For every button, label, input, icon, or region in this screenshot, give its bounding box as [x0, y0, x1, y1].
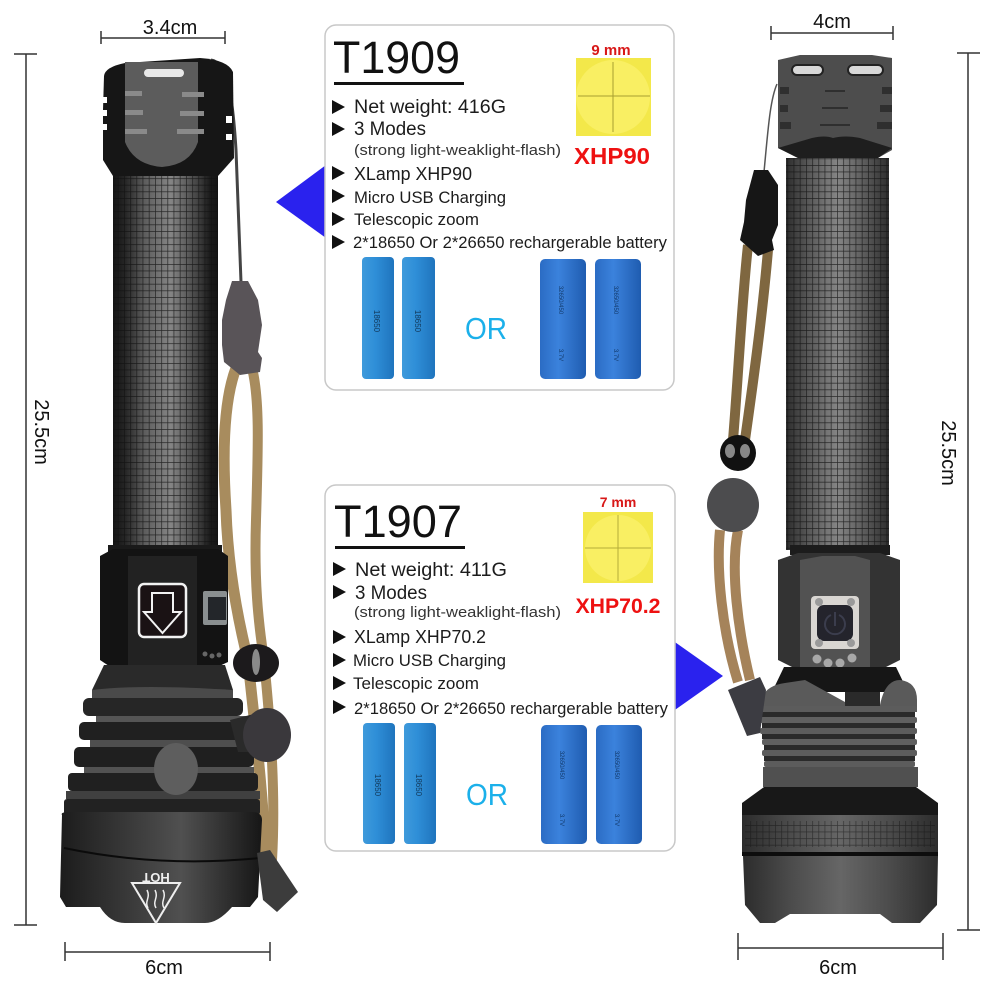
dimension: right height 25.5cm — [937, 53, 980, 930]
left flashlight T1909 — [60, 58, 298, 923]
26650 batteries: 32650/450 — [558, 751, 564, 780]
right collar ring — [790, 545, 890, 555]
left flare and fins — [64, 665, 260, 815]
blue pointer to T1909 — [276, 165, 326, 238]
right indicator LEDs — [812, 654, 856, 668]
heading T1909: T1909 — [333, 32, 460, 83]
18650 batteries — [362, 257, 435, 379]
right bezel — [743, 856, 938, 923]
26650 batteries: 32650/450 — [612, 286, 618, 315]
left hex collar — [100, 549, 228, 668]
dimension: bottom left width 6cm — [65, 942, 270, 979]
left head ridges — [125, 91, 204, 134]
18650 batteries: 18650 — [372, 310, 381, 333]
dimension: right height 25.5cm: 25.5cm — [937, 420, 959, 486]
left bezel groove — [64, 848, 260, 861]
icon: arrow button — [139, 584, 186, 637]
dimension: top left width 3.4cm — [101, 17, 225, 44]
dimension: bottom right width 6cm — [738, 933, 943, 979]
spec list: XLamp XHP90 — [354, 164, 472, 184]
left head slot — [144, 69, 184, 77]
left cord end — [257, 850, 298, 912]
right hex collar — [778, 553, 900, 667]
dimension: top right width 4cm: 4cm — [813, 11, 851, 33]
highlight blob — [154, 743, 198, 795]
chip size label: 9 mm — [591, 42, 631, 59]
right lobes — [760, 680, 917, 712]
26650 batteries: 3.7V — [612, 349, 618, 361]
26650 batteries: 3.7V — [558, 814, 564, 826]
left collar facet — [128, 556, 197, 668]
panel background — [325, 25, 674, 390]
spec list: (strong light-weaklight-flash) — [354, 143, 561, 159]
left head notches — [101, 97, 232, 140]
left bead — [233, 644, 279, 682]
spec list: 2*18650 Or 2*26650 rechargerable battery — [354, 699, 668, 718]
right fins — [760, 706, 918, 787]
right head ridges — [780, 87, 892, 129]
right collar facet — [800, 556, 870, 667]
bullet triangles — [333, 562, 346, 714]
OR label: OR — [465, 311, 507, 346]
26650 batteries — [540, 259, 641, 379]
right head — [778, 55, 892, 158]
spec list: Net weight: 411G — [355, 560, 507, 581]
panel: T1907 specs — [325, 485, 675, 851]
left head facet — [125, 62, 198, 167]
spec list: Micro USB Charging — [354, 188, 506, 207]
chip name: XHP90 — [574, 143, 650, 169]
spec list: Telescopic zoom — [353, 674, 479, 693]
18650 batteries: 18650 — [373, 774, 382, 797]
right thin lanyard — [764, 84, 777, 172]
left buckle — [222, 281, 262, 375]
right neck — [772, 667, 908, 692]
heading underline — [334, 82, 464, 85]
right flashlight T1907 — [707, 55, 938, 923]
left cord stopper — [230, 708, 291, 762]
chip name: XHP70.2 — [576, 595, 660, 618]
right bezel shoulder — [742, 787, 938, 815]
panel background — [325, 485, 675, 851]
spec list: Net weight: 416G — [354, 97, 506, 118]
right power switch — [811, 596, 859, 649]
right knurled body — [786, 158, 889, 550]
26650 batteries: 32650/450 — [557, 286, 563, 315]
blue pointer from T1907 — [672, 640, 723, 712]
right head chamfer — [778, 136, 892, 158]
heading T1907: T1907 — [334, 496, 462, 547]
spec list: XLamp XHP70.2 — [354, 627, 486, 647]
right head slots — [792, 65, 883, 75]
left collar ring — [108, 545, 222, 557]
chip size label: 7 mm — [600, 494, 636, 510]
OR label: OR — [466, 777, 508, 812]
left head — [103, 58, 234, 176]
dimension: top left width 3.4cm: 3.4cm — [143, 17, 197, 39]
dimension: bottom left width 6cm: 6cm — [145, 957, 183, 979]
right cord stopper — [707, 478, 759, 532]
right cords — [719, 245, 768, 682]
bullet triangles — [332, 100, 345, 249]
26650 batteries — [541, 725, 642, 844]
26650 batteries: 32650/450 — [613, 751, 619, 780]
HOT logo: HOT — [142, 870, 170, 885]
spec list: 2*18650 Or 2*26650 rechargerable battery — [353, 233, 667, 252]
spec list: Telescopic zoom — [354, 210, 479, 229]
dimension: bottom right width 6cm: 6cm — [819, 957, 857, 979]
18650 batteries — [363, 723, 436, 844]
spec list: (strong light-weaklight-flash) — [354, 605, 561, 621]
left lanyard — [211, 60, 273, 860]
dimension: top right width 4cm — [771, 11, 893, 40]
left power switch — [202, 591, 227, 658]
LED chip XHP70.2 — [583, 512, 653, 583]
18650 batteries: 18650 — [414, 774, 423, 797]
left knurled body — [113, 176, 218, 550]
26650 batteries: 3.7V — [613, 814, 619, 826]
left bezel — [60, 812, 262, 923]
18650 batteries: 18650 — [413, 310, 422, 333]
right knurled ring — [742, 815, 938, 856]
LED chip XHP90 — [576, 58, 651, 136]
right buckle — [740, 170, 778, 256]
spec list: 3 Modes — [354, 119, 426, 140]
panel: T1909 specs — [325, 25, 674, 390]
spec list: Micro USB Charging — [353, 651, 506, 670]
right cord end — [728, 677, 766, 736]
heading underline — [335, 546, 465, 549]
HOT logo — [132, 870, 180, 923]
dimension: left height 25.5cm — [14, 54, 52, 925]
dimension: left height 25.5cm: 25.5cm — [30, 399, 52, 465]
spec list — [353, 560, 668, 718]
right bead — [720, 435, 756, 471]
spec list — [353, 97, 667, 252]
26650 batteries: 3.7V — [557, 349, 563, 361]
spec list: 3 Modes — [355, 583, 427, 604]
